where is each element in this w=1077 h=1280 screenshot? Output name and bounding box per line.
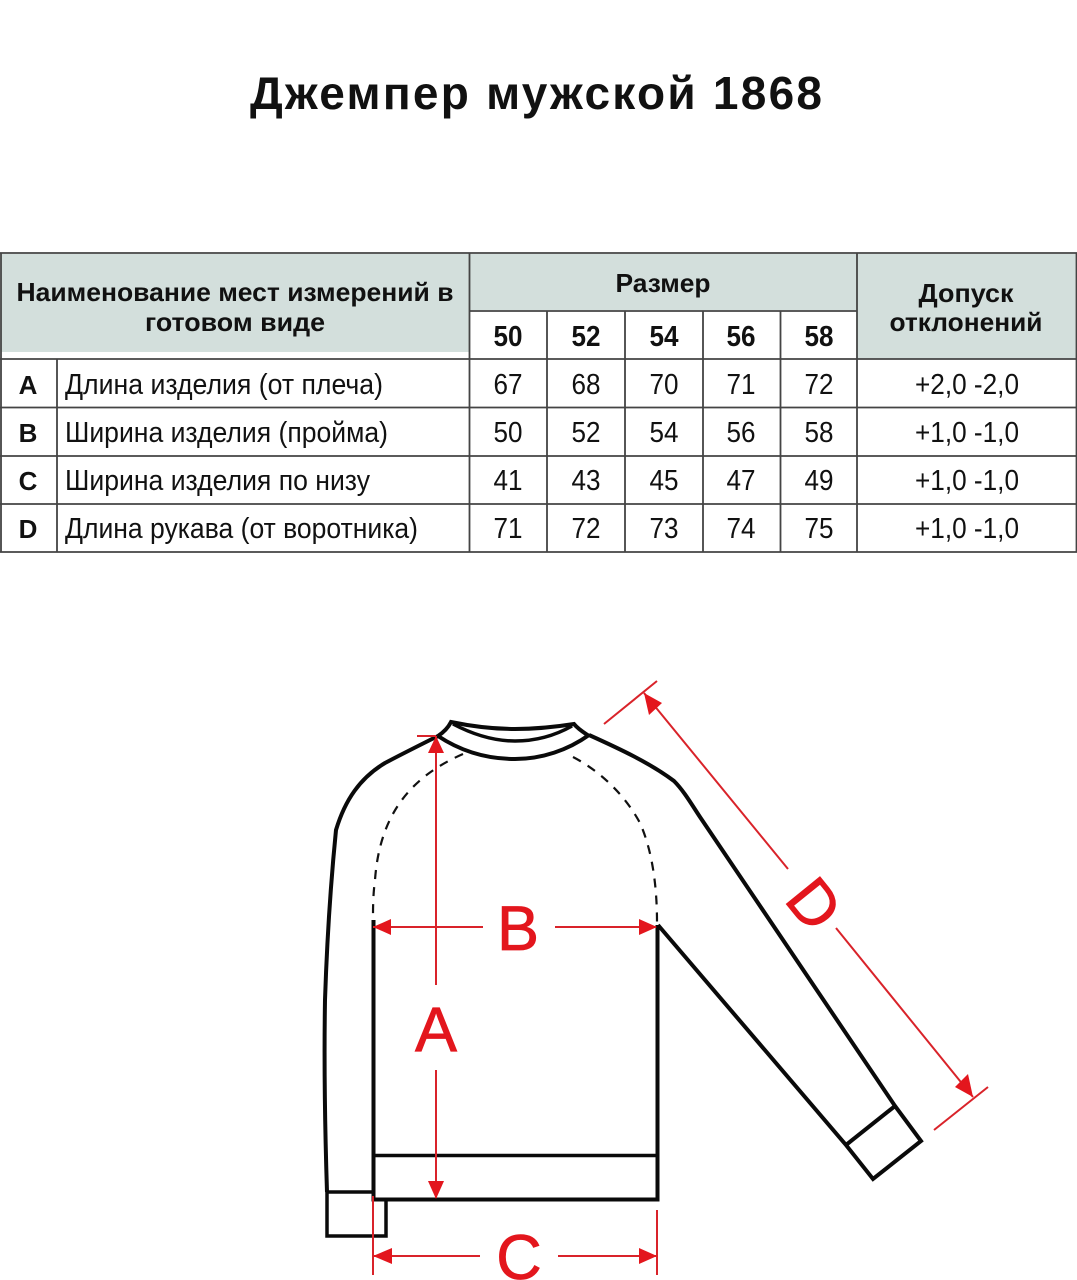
title: Джемпер мужской 1868 — [250, 67, 822, 119]
row A: 71 — [726, 369, 756, 401]
measurement A — [415, 736, 457, 1199]
row B: 50 — [494, 417, 522, 449]
row C: Ширина изделия по низу — [65, 465, 370, 497]
row B — [19, 417, 1019, 449]
header: tolerance: отклонений — [890, 307, 1042, 337]
header: measurement names: готовом виде — [145, 307, 325, 337]
measurement B — [373, 894, 657, 964]
row B: B — [19, 418, 37, 448]
row D: +1,0 -1,0 — [915, 513, 1019, 545]
row C: 45 — [650, 465, 678, 497]
header: size numbers: 50 — [494, 321, 522, 353]
row A: 72 — [804, 369, 834, 401]
icon: raglan seams dashed — [373, 754, 657, 922]
row C: +1,0 -1,0 — [915, 465, 1019, 497]
row C: 49 — [804, 465, 834, 497]
row D: 72 — [572, 513, 600, 545]
measurement A: A — [415, 995, 457, 1065]
row C: C — [19, 466, 38, 496]
header: size numbers: 56 — [726, 321, 756, 353]
measurement D: D — [772, 865, 855, 944]
row B: 58 — [804, 417, 834, 449]
header: size numbers: 52 — [572, 321, 600, 353]
row D: 71 — [494, 513, 522, 545]
icon: body and hem — [374, 920, 658, 1200]
icon: right sleeve and cuff — [589, 735, 921, 1179]
row B: 56 — [726, 417, 756, 449]
row C — [19, 465, 1019, 497]
row B: Ширина изделия (пройма) — [65, 417, 388, 449]
table header backgrounds — [1, 254, 1077, 359]
jumper outline drawing — [325, 722, 921, 1236]
row A — [19, 369, 1019, 401]
row A: +2,0 -2,0 — [915, 369, 1019, 401]
row A: 70 — [650, 369, 678, 401]
row C: 47 — [726, 465, 756, 497]
row A: 67 — [494, 369, 522, 401]
row D: D — [19, 514, 37, 544]
row C: 43 — [572, 465, 600, 497]
row D: 75 — [804, 513, 834, 545]
row D — [19, 513, 1019, 545]
row A: Длина изделия (от плеча) — [65, 369, 383, 401]
icon: collar — [438, 722, 589, 759]
header: tolerance: Допуск — [918, 278, 1015, 308]
size table — [0, 253, 1077, 552]
header: measurement names: Наименование мест измерений в — [16, 277, 453, 307]
row B: 54 — [650, 417, 678, 449]
row A: A — [19, 370, 38, 400]
measurement B: B — [497, 894, 539, 964]
row D: 74 — [726, 513, 756, 545]
icon: left sleeve and cuff — [325, 736, 438, 1236]
row D: 73 — [650, 513, 678, 545]
measurement D — [604, 681, 988, 1130]
row B: 52 — [572, 417, 600, 449]
header: size numbers: 58 — [804, 321, 834, 353]
header: tolerance — [890, 278, 1042, 337]
header: size: Размер — [616, 268, 710, 298]
header: size numbers: 54 — [650, 321, 678, 353]
header: size numbers — [494, 321, 834, 353]
row D: Длина рукава (от воротника) — [65, 513, 418, 545]
row C: 41 — [494, 465, 522, 497]
measurement C — [373, 1196, 657, 1280]
row A: 68 — [572, 369, 600, 401]
header: measurement names — [16, 277, 453, 337]
table grid — [0, 253, 1077, 552]
row B: +1,0 -1,0 — [915, 417, 1019, 449]
